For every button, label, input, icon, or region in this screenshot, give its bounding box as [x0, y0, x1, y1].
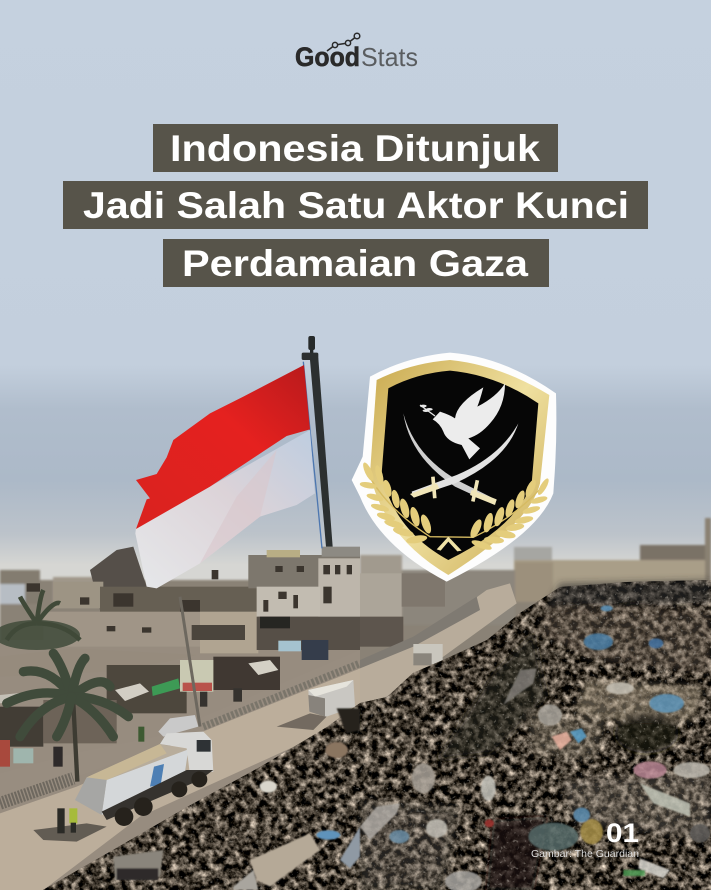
garbage mound	[43, 580, 711, 890]
car	[158, 715, 198, 737]
Indonesian flag on pole	[135, 336, 333, 588]
far tree	[7, 590, 80, 640]
crossed swords	[403, 413, 518, 505]
logo: GoodStats: Good	[295, 42, 360, 72]
utility pole	[180, 597, 200, 727]
far town skyline	[0, 518, 711, 720]
dove with olive branch	[420, 383, 505, 459]
red stripe	[136, 365, 310, 529]
shadows and workers	[33, 823, 107, 842]
logo: GoodStats	[295, 33, 418, 72]
tonal patches	[360, 580, 711, 890]
trash items	[503, 668, 537, 705]
ground and road	[0, 640, 360, 890]
white box truck	[308, 680, 355, 717]
title: Indonesia Ditunjuk	[170, 128, 540, 169]
gold frame	[370, 360, 549, 575]
roof and shops	[0, 648, 197, 677]
emblem shield	[352, 353, 556, 582]
buildings	[90, 547, 147, 610]
title: Perdamaian Gaza	[182, 243, 528, 284]
far road right of shield	[360, 573, 517, 703]
rope	[303, 362, 322, 548]
goods at left	[0, 740, 10, 767]
page number: 01	[606, 818, 639, 848]
flag pole	[302, 336, 333, 547]
sticker outline	[352, 353, 556, 582]
black field	[382, 371, 538, 560]
palm tree	[73, 690, 77, 782]
logo: GoodStats: Stats	[361, 42, 418, 72]
dump truck	[75, 744, 188, 815]
laurel wreath	[359, 461, 551, 552]
title: Jadi Salah Satu Aktor Kunci	[83, 185, 629, 226]
fence	[203, 663, 360, 727]
image credit: Gambar: The Guardian	[531, 848, 639, 860]
windows	[27, 565, 352, 633]
lower left debris	[113, 850, 163, 880]
street scene: buildings, road, truck	[0, 547, 360, 890]
title	[63, 124, 648, 287]
white stripe	[135, 430, 315, 588]
